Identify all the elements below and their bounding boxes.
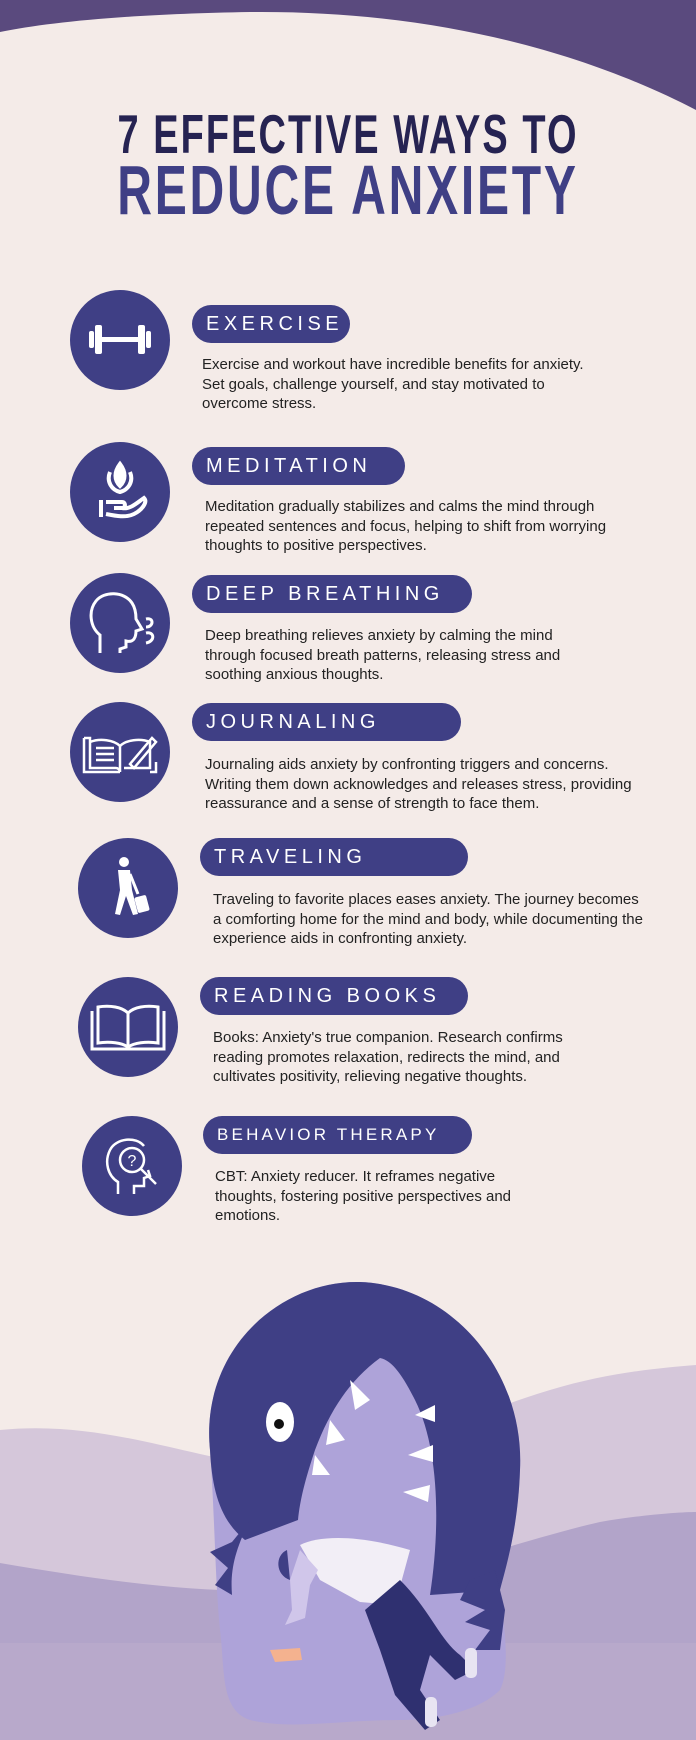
text: journaling: Journaling aids anxiety by confronting triggers and concerns. Writing them down acknowledges and releases stress, providing reassurance and a sense of strength to face them. [205,756,632,812]
icon: dumbbell [70,290,170,390]
title: REDUCE ANXIETY [117,151,579,229]
pill: exercise [192,305,350,343]
icon: open book with pen [70,702,170,802]
text: exercise: Exercise and workout have incredible benefits for anxiety. Set goals, challenge yourself, and stay motivated to overcome stress. [202,356,584,412]
title [117,103,579,229]
icon: head with question magnifier: ? [128,1153,137,1170]
title: 7 EFFECTIVE WAYS TO [117,103,579,165]
pill: behavior therapy: BEHAVIOR THERAPY [217,1125,440,1144]
text: traveling: Traveling to favorite places eases anxiety. The journey becomes a comforting home for the mind and body, while documenting the experience aids in confronting anxiety. [213,891,643,947]
pill: deep breathing: DEEP BREATHING [206,583,444,605]
pill: exercise: EXERCISE [206,313,343,335]
item: behavior therapy [82,1116,511,1224]
pill: traveling: TRAVELING [214,846,366,868]
item: reading books [78,977,563,1085]
item: deep breathing [70,573,560,683]
pill: journaling: JOURNALING [206,711,380,733]
item: meditation [70,442,606,554]
icon: head breathing [70,573,170,673]
icon: open book [78,977,178,1077]
pill: deep breathing [192,575,472,613]
pill: reading books: READING BOOKS [214,985,440,1007]
item: traveling [78,838,643,947]
item: exercise [70,290,584,412]
item: journaling [70,702,632,812]
text: deep breathing: Deep breathing relieves anxiety by calming the mind through focused breath patterns, releasing stress and soothing anxious thoughts. [205,627,560,683]
icon: traveler with suitcase [78,838,178,938]
text: behavior therapy: CBT: Anxiety reducer. It reframes negative thoughts, fostering positive perspectives and emotions. [215,1168,511,1224]
pill: behavior therapy [203,1116,472,1154]
pill: traveling [200,838,468,876]
pill: meditation: MEDITATION [206,455,371,477]
text: meditation: Meditation gradually stabilizes and calms the mind through repeated sentences and focus, helping to shift from worrying thoughts to positive perspectives. [205,498,606,554]
pill: journaling [192,703,461,741]
icon: head with question magnifier [82,1116,182,1216]
text: reading books: Books: Anxiety's true companion. Research confirms reading promotes relaxation, redirects the mind, and cultivates positivity, relieving negative thoughts. [213,1029,563,1085]
top purple wave [0,0,696,110]
pill: meditation [192,447,405,485]
icon: lotus hand [70,442,170,542]
illustration: anxiety monster over person [0,1282,696,1740]
monster body [209,1282,520,1724]
pill: reading books [200,977,468,1015]
person crouching [270,1538,477,1730]
